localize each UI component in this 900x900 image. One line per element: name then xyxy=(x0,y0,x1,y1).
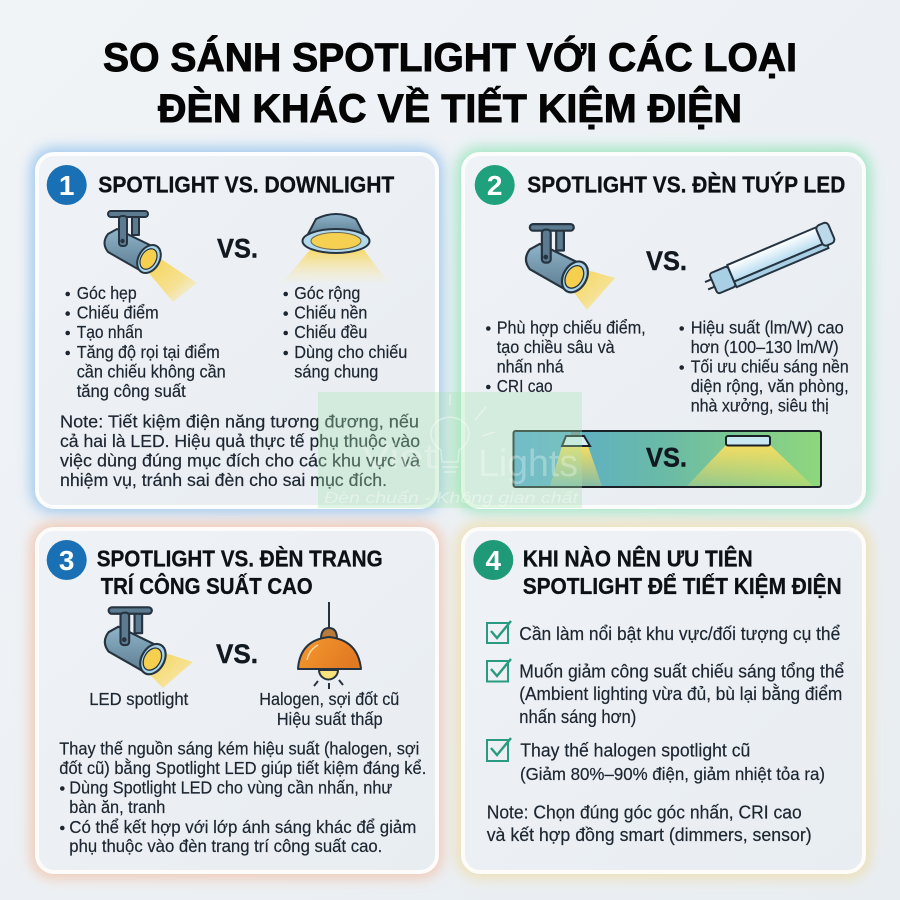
checklist item 2: Muốn giảm công suất chiếu sáng tổng thể xyxy=(519,662,844,682)
icon: spotlight xyxy=(104,211,197,302)
heading 4: KHI NÀO NÊN ƯU TIÊN xyxy=(523,545,753,572)
text block 3: Có thể kết hợp với lớp ánh sáng khác để giảm xyxy=(69,817,416,837)
heading 3: SPOTLIGHT VS. ĐÈN TRANG xyxy=(97,545,383,572)
checklist item 3 xyxy=(487,738,825,784)
list: spotlight traits xyxy=(65,283,226,401)
list: spotlight traits: tăng công suất xyxy=(77,381,186,401)
list: downlight traits: Góc rộng xyxy=(294,283,360,303)
note 1: Note: Tiết kiệm điện năng tương đương, nếu xyxy=(60,412,419,432)
badge 1 xyxy=(47,165,87,205)
list: LED tube fit xyxy=(679,317,849,416)
comparison strip: VS. xyxy=(646,443,687,473)
panel 2: spotlight vs LED tube xyxy=(457,148,870,512)
title xyxy=(103,34,797,131)
checklist item 3: (Giảm 80%–90% điện, giảm nhiệt tỏa ra) xyxy=(520,764,825,784)
list: spotlight traits: Tạo nhấn xyxy=(77,322,143,342)
icon: spotlight xyxy=(105,607,193,688)
panel 1: spotlight vs downlight xyxy=(31,148,442,512)
list: LED tube fit: Tối ưu chiếu sáng nền xyxy=(691,356,849,376)
list: downlight traits xyxy=(283,283,407,382)
icon: spotlight xyxy=(526,224,615,310)
note 1: việc dùng đúng mục đích cho các khu vực và xyxy=(60,450,420,470)
label: halogen: Hiệu suất thấp xyxy=(277,709,383,729)
list: downlight traits: sáng chung xyxy=(294,362,378,382)
label: halogen xyxy=(259,689,399,729)
list: spotlight traits: Tăng độ rọi tại điểm xyxy=(77,342,220,362)
badge 3 xyxy=(47,540,87,580)
text block 3: Dùng Spotlight LED cho vùng cần nhấn, như xyxy=(69,778,393,798)
heading 3 xyxy=(97,545,383,599)
heading 1: SPOTLIGHT VS. DOWNLIGHT xyxy=(98,171,394,197)
list: spotlight traits: cần chiếu không cần xyxy=(77,362,226,382)
list: spotlight fit xyxy=(486,317,646,396)
heading 4 xyxy=(523,545,842,599)
comparison strip xyxy=(514,431,821,487)
versus label: VS. xyxy=(216,639,258,669)
badge 4: 4 xyxy=(486,545,502,576)
list: downlight traits: Chiếu nền xyxy=(294,303,367,323)
heading 3: TRÍ CÔNG SUẤT CAO xyxy=(101,572,313,599)
badge 4 xyxy=(473,540,513,580)
text block 3: đốt cũ) bằng Spotlight LED giúp tiết kiệm đáng kể. xyxy=(59,758,426,778)
text block 3: bàn ăn, tranh xyxy=(69,797,165,817)
note 4 xyxy=(487,802,812,845)
note 1 xyxy=(60,412,420,490)
checklist item 2 xyxy=(487,659,844,727)
list: LED tube fit: nhà xưởng, siêu thị xyxy=(691,396,829,416)
panel 4: when to prefer spotlight xyxy=(457,523,870,878)
heading 2: SPOTLIGHT VS. ĐÈN TUÝP LED xyxy=(527,170,845,197)
list: LED tube fit: hơn (100–130 lm/W) xyxy=(691,337,839,357)
note 1: nhiệm vụ, tránh sai đèn cho sai mục đích. xyxy=(60,470,387,490)
list: spotlight fit: nhấn nhá xyxy=(497,356,564,376)
list: downlight traits: Chiếu đều xyxy=(294,322,367,342)
note 4: Note: Chọn đúng góc góc nhấn, CRI cao xyxy=(487,802,802,822)
versus label: VS. xyxy=(217,234,258,264)
panel 3: spotlight vs decorative lamp xyxy=(31,523,442,878)
note 1: cả hai là LED. Hiệu quả thực tế phụ thuộc vào xyxy=(60,431,420,451)
label: halogen: Halogen, sợi đốt cũ xyxy=(259,689,399,709)
watermark: Lights xyxy=(478,443,578,485)
icon: LED tube xyxy=(702,222,837,298)
list: LED tube fit: Hiệu suất (lm/W) cao xyxy=(691,317,844,337)
list: LED tube fit: diện rộng, văn phòng, xyxy=(691,376,849,396)
list: downlight traits: Dùng cho chiếu xyxy=(294,342,407,362)
checklist item 1: Cần làm nổi bật khu vực/đối tượng cụ thể xyxy=(519,624,840,644)
versus label: VS. xyxy=(646,246,687,276)
text block 3: Thay thế nguồn sáng kém hiệu suất (halogen, sợi xyxy=(59,738,419,758)
note 4: và kết hợp đồng smart (dimmers, sensor) xyxy=(487,825,812,845)
label: LED spotlight: LED spotlight xyxy=(89,689,188,709)
checklist item 2: (Ambient lighting vừa đủ, bù lại bằng điểm xyxy=(519,683,842,704)
text block 3: phụ thuộc vào đèn trang trí công suất cao. xyxy=(69,836,382,856)
text block 3 xyxy=(59,738,426,856)
watermark: Viet xyxy=(361,438,437,476)
title: SO SÁNH SPOTLIGHT VỚI CÁC LOẠI xyxy=(103,34,797,80)
badge 2: 2 xyxy=(487,170,502,201)
watermark xyxy=(318,392,582,508)
badge 3: 3 xyxy=(59,545,74,576)
badge 1: 1 xyxy=(59,170,74,201)
badge 2 xyxy=(475,165,515,205)
heading 4: SPOTLIGHT ĐỂ TIẾT KIỆM ĐIỆN xyxy=(523,572,842,599)
list: spotlight traits: Góc hẹp xyxy=(77,283,137,303)
list: spotlight fit: tạo chiều sâu và xyxy=(497,337,615,357)
icon: downlight xyxy=(283,214,388,282)
list: spotlight fit: Phù hợp chiếu điểm, xyxy=(497,317,646,337)
list: spotlight traits: Chiếu điểm xyxy=(77,303,159,323)
checklist item 2: nhấn sáng hơn) xyxy=(519,707,636,727)
list: spotlight fit: CRI cao xyxy=(497,376,553,396)
watermark: Đèn chuẩn - Không gian chất xyxy=(324,490,579,507)
icon: pendant lamp xyxy=(298,602,361,689)
title: ĐÈN KHÁC VỀ TIẾT KIỆM ĐIỆN xyxy=(158,85,742,131)
checklist item 3: Thay thế halogen spotlight cũ xyxy=(520,741,750,761)
